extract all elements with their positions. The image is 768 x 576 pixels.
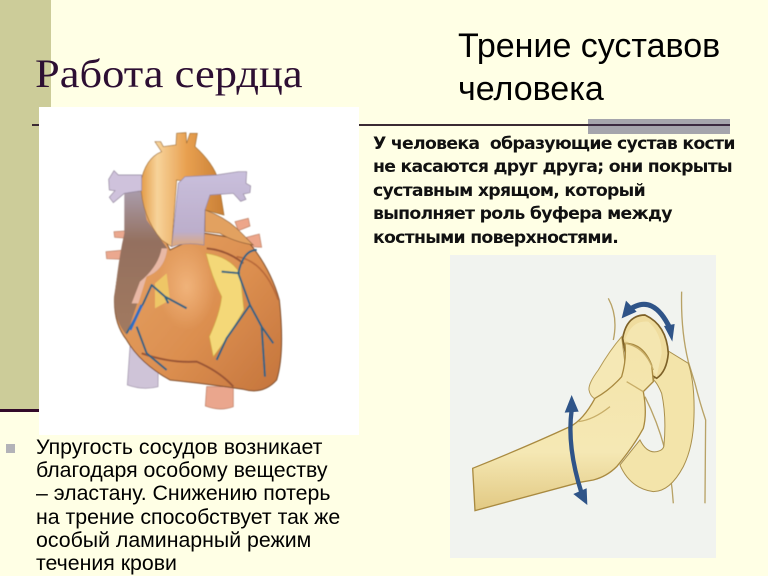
femur neck line [578, 343, 653, 422]
text block: elastane: благодаря особому веществу [36, 458, 328, 482]
superior vena cava branches [109, 171, 142, 203]
arrow: shaft rotation [565, 395, 587, 505]
left decorative band [0, 0, 51, 409]
conus highlight [158, 243, 215, 330]
left auricle [205, 210, 253, 245]
text block: cartilage [373, 134, 735, 248]
upper pelvis lobe [589, 337, 627, 400]
text block: cartilage: не касаются друг друга; они покрыты [373, 157, 732, 177]
yellow fat [206, 253, 244, 357]
text block: elastane: течения крови [36, 551, 177, 575]
text block: cartilage: У человека образующие сустав кости [373, 134, 735, 154]
rule over accent [588, 124, 730, 126]
arrow: socket rotation [622, 301, 675, 342]
header rule [32, 124, 730, 126]
lower vessels [127, 347, 158, 388]
bottom rule of band [0, 409, 40, 412]
right side stubs [235, 218, 262, 247]
text block: elastane: особый ламинарный режим [36, 528, 311, 552]
femur [473, 343, 653, 511]
text block: elastane: Упругость сосудов возникает [36, 435, 322, 459]
rule accent block [588, 119, 730, 134]
left side stubs [106, 231, 130, 259]
title: joint friction: Трение суставов [458, 27, 720, 65]
aorta [141, 133, 224, 247]
dark vessels and rim [142, 248, 243, 387]
text block: elastane: – эластану. Снижению потерь [36, 481, 330, 505]
dark right atrium [115, 192, 167, 335]
text block: cartilage: выполняет роль буфера между [373, 204, 672, 224]
pelvis outline lines [608, 292, 706, 503]
pink atrium rim [132, 248, 167, 303]
heart body [115, 192, 282, 391]
text block: elastane: на трение способствует так же [36, 505, 340, 529]
title: heart: Работа сердца [35, 51, 303, 96]
text block: cartilage: суставным хрящом, который [373, 181, 645, 201]
title: joint friction [458, 27, 720, 108]
pulmonary artery [172, 172, 251, 247]
text block: cartilage: костными поверхностями. [373, 228, 618, 248]
femoral head [625, 322, 662, 377]
hip joint picture [450, 255, 716, 558]
pelvis right body [620, 350, 694, 492]
heart picture [39, 107, 359, 435]
bullet marker [6, 444, 15, 453]
text block: elastane [36, 435, 340, 575]
blue vessels [127, 250, 273, 377]
title: joint friction: человека [458, 70, 604, 108]
socket [623, 315, 668, 378]
